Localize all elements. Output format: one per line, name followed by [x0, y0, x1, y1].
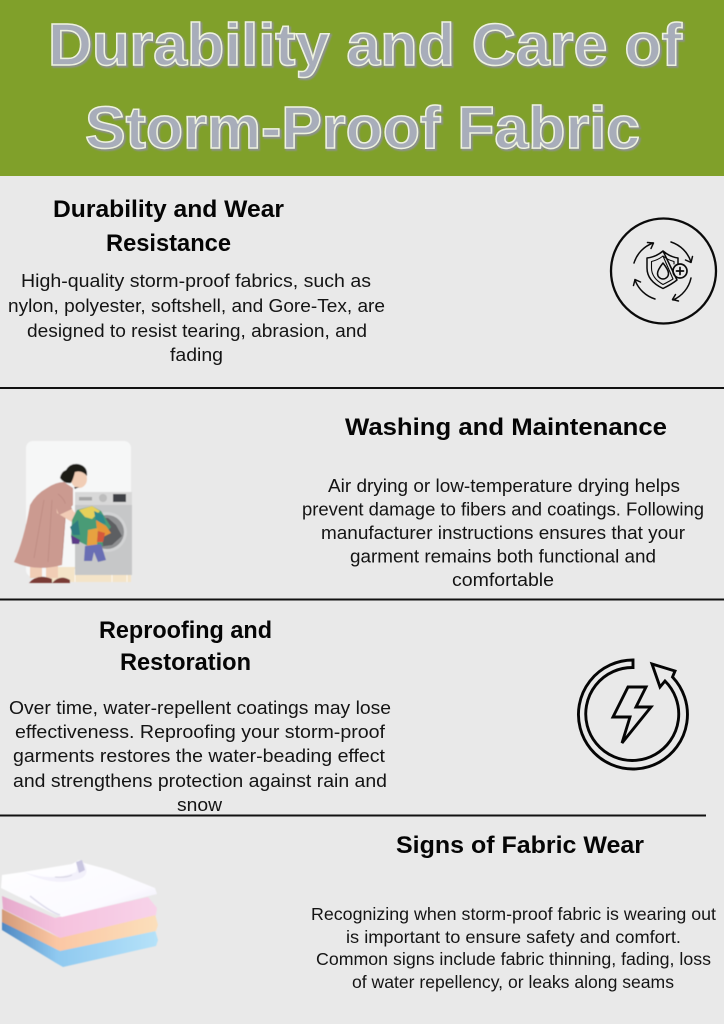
text: washing body: comfortable [452, 570, 554, 590]
text: reproofing body: and strengthens protection against rain and [13, 771, 387, 791]
text: reproofing body [9, 698, 391, 815]
header banner [0, 0, 724, 176]
icon: lightning bolt in circular arrow [578, 660, 687, 769]
heading: durability [53, 196, 284, 257]
text: washing body: garment remains both functional and [350, 546, 656, 566]
panel: signs of fabric wear [1, 832, 716, 992]
panel: durability and wear resistance [8, 196, 716, 365]
title [48, 12, 684, 162]
title: Storm-Proof Fabric [86, 96, 642, 162]
illustration: woman loading washing machine [14, 441, 132, 583]
title: Durability and Care of [50, 14, 684, 80]
heading: reproofing: Restoration [120, 649, 251, 676]
text: durability body [8, 271, 385, 365]
text: reproofing body: Over time, water-repellent coatings may lose [9, 698, 391, 718]
panel: reproofing and restoration [9, 617, 687, 815]
heading: reproofing [99, 617, 272, 676]
heading: washing: Washing and Maintenance [345, 414, 667, 441]
heading: reproofing: Reproofing and [99, 617, 272, 644]
heading: durability: Durability and Wear [53, 196, 284, 223]
title: Storm-Proof Fabric [85, 95, 640, 161]
text: washing body: prevent damage to fibers and coatings. Following [302, 500, 704, 520]
woman head [71, 470, 87, 488]
text: signs body [311, 904, 716, 992]
text: signs body: Recognizing when storm-proof fabric is wearing out [311, 904, 716, 924]
text: reproofing body: effectiveness. Reproofing your storm-proof [15, 722, 386, 742]
woman dress [14, 482, 73, 568]
text: reproofing body: garments restores the water-beading effect [13, 746, 385, 766]
panel: washing and maintenance [14, 414, 704, 590]
orange shirt [2, 909, 158, 951]
text: reproofing body: snow [177, 795, 223, 815]
text: washing body [302, 476, 704, 590]
clothes [71, 506, 111, 548]
title: Durability and Care of [48, 12, 682, 78]
text: washing body: manufacturer instructions ensures that your [321, 523, 685, 543]
text: durability body: nylon, polyester, softshell, and Gore-Tex, are [8, 296, 385, 316]
white shirt [1, 860, 157, 917]
heading: signs: Signs of Fabric Wear [396, 832, 644, 859]
text: washing body: Air drying or low-temperature drying helps [328, 476, 680, 496]
woman legs and shoes [30, 562, 58, 578]
blue shirt [2, 920, 158, 967]
text: durability body: designed to resist tearing, abrasion, and [27, 321, 367, 341]
text: signs body: of water repellency, or leaks along seams [352, 972, 674, 992]
woman arm [56, 505, 91, 527]
text: signs body: is important to ensure safety and comfort. [346, 927, 681, 947]
text: signs body: Common signs include fabric thinning, fading, loss [316, 949, 711, 969]
text: durability body: fading [170, 345, 223, 365]
pink shirt [2, 896, 157, 938]
illustration: stack of folded shirts [1, 860, 158, 967]
icon: shield with water drop in cycle [611, 218, 716, 324]
text: durability body: High-quality storm-proof fabrics, such as [21, 271, 371, 291]
heading: durability: Resistance [106, 230, 231, 257]
